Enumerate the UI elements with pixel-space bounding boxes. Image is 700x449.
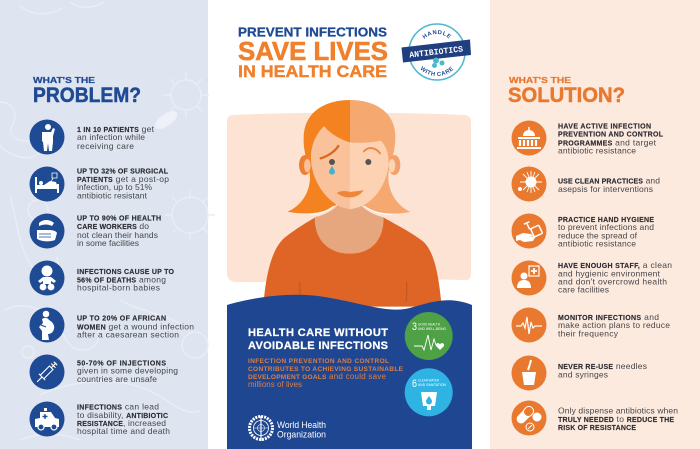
icon: syringe xyxy=(22,347,72,397)
tear xyxy=(329,166,335,175)
item: infection prevention programmes xyxy=(512,120,664,156)
logo: World Health Organization: Organization xyxy=(277,430,326,440)
text: surgical patients: PATIENTS get a post-op xyxy=(77,174,169,184)
badge: SDG 3 good health xyxy=(405,312,453,360)
text: hand hygiene: PRACTICE HAND HYGIENE xyxy=(558,217,654,224)
heading: health care without avoidable infections: AVOIDABLE INFECTIONS xyxy=(248,340,388,352)
panel: what's the solution xyxy=(490,0,700,449)
icon: health worker and medical cross xyxy=(512,260,546,296)
item: dispense antibiotics xyxy=(512,400,678,436)
heading: health care without avoidable infections xyxy=(248,327,388,352)
text: dispense antibiotics: RISK OF RESISTANCE xyxy=(558,425,636,432)
badge: SDG 6 clean water: AND SANITATION xyxy=(418,383,446,387)
text: dispense antibiotics: Only dispense antibiotics when xyxy=(558,405,678,415)
text: clean practices: asepsis for interventions xyxy=(558,184,653,194)
badge: handle antibiotics with care: HANDLE xyxy=(422,30,452,39)
text: surgical patients: infection, up to 51% xyxy=(77,182,152,192)
badge: SDG 3 good health: AND WELL-BEING xyxy=(418,327,446,331)
text: monitor infections: make action plans to reduce xyxy=(558,320,670,330)
item: never re-use needles xyxy=(512,356,647,390)
text: surgical patients xyxy=(77,168,169,200)
text: health care workers' hands: CARE WORKERS do xyxy=(77,221,149,231)
text: enough staff: care facilities xyxy=(558,285,609,295)
text: hand hygiene: antibiotic resistance xyxy=(558,239,636,249)
heading: what's the problem: WHAT'S THE xyxy=(33,75,95,85)
ears xyxy=(299,155,311,175)
text: hand hygiene: reduce the spread of xyxy=(558,230,638,240)
badge: handle antibiotics with care xyxy=(402,23,471,81)
text: hand hygiene: to prevent infections and xyxy=(558,222,654,232)
item: clean practices xyxy=(512,166,660,202)
icon: hospital bed xyxy=(30,166,64,202)
title: PREVENT INFECTIONS xyxy=(238,24,387,40)
badge: handle antibiotics with care: WITH CARE xyxy=(420,66,454,76)
title: SAVE LIVES xyxy=(238,36,388,66)
text: consequences of infections: RESISTANCE, increased xyxy=(77,418,166,428)
icon: hand and soap bottle xyxy=(512,214,546,248)
heading: what's the problem: PROBLEM? xyxy=(33,84,141,107)
text: enough staff: and hygienic environment xyxy=(558,268,661,278)
text: surgical patients: antibiotic resistant xyxy=(77,190,148,200)
text: dispense antibiotics: TRULY NEEDED to REDUCE THE xyxy=(558,414,674,424)
icon: pulse wave xyxy=(512,308,546,342)
item: deaths among babies xyxy=(30,260,175,296)
text: African women: UP TO 20% OF AFRICAN xyxy=(77,316,166,323)
text: 1 in 10 patients xyxy=(77,124,155,151)
text: African women: WOMEN get a wound infection xyxy=(77,321,194,331)
text: never re-use needles: NEVER RE-USE needles xyxy=(558,361,647,371)
text: health care workers' hands: in some facilities xyxy=(77,238,139,248)
hair, left half xyxy=(287,100,350,213)
text: consequences of infections xyxy=(77,401,170,436)
panel: health care without avoidable infections xyxy=(227,295,472,449)
text: never re-use needles xyxy=(558,361,647,379)
item: African women xyxy=(30,308,194,342)
text: deaths among babies: 56% OF DEATHS among xyxy=(77,275,166,285)
text: sustainable development goals: DEVELOPMENT GOALS and could save xyxy=(248,372,387,381)
icon: pills xyxy=(512,400,546,436)
badge: handle antibiotics with care: ANTIBIOTICS xyxy=(409,44,464,61)
text: sustainable development goals: CONTRIBUTES TO ACHIEVING SUSTAINABLE xyxy=(248,366,404,373)
hair, right half xyxy=(350,100,411,214)
text: consequences of infections: INFECTIONS can lead xyxy=(77,401,159,411)
badge: SDG 3 good health: 3 xyxy=(412,321,417,333)
text: deaths among babies xyxy=(77,269,175,293)
title xyxy=(238,24,388,81)
item: unsafe injections xyxy=(22,347,178,397)
item: monitor infections xyxy=(512,308,670,342)
text: consequences of infections: hospital time and death xyxy=(77,426,170,436)
panel: what's the problem xyxy=(0,0,215,449)
illustration: sad woman xyxy=(227,100,471,307)
text: infection prevention programmes: HAVE ACTIVE INFECTION xyxy=(558,124,651,131)
text: clean practices: USE CLEAN PRACTICES and xyxy=(558,175,660,185)
heading: what's the solution: WHAT'S THE xyxy=(509,75,571,85)
text: health care workers' hands xyxy=(77,216,161,248)
text: African women xyxy=(77,316,194,339)
badge: SDG 3 good health: GOOD HEALTH xyxy=(418,322,440,326)
brows xyxy=(321,146,338,158)
item: 1 in 10 patients xyxy=(30,120,155,154)
icon: baby xyxy=(30,260,64,296)
text: infection prevention programmes: PROGRAMMES and target xyxy=(558,137,657,147)
text: infection prevention programmes xyxy=(558,124,664,155)
face xyxy=(311,126,350,209)
text: monitor infections: MONITOR INFECTIONS and xyxy=(558,312,659,322)
badge: SDG 6 clean water xyxy=(405,368,453,416)
mouth xyxy=(337,190,364,197)
item: health care workers' hands xyxy=(30,214,161,248)
icon: washing hands xyxy=(30,214,64,248)
text: sustainable development goals: INFECTION PREVENTION AND CONTROL xyxy=(248,358,389,365)
text: never re-use needles: and syringes xyxy=(558,369,608,379)
text: infection prevention programmes: antibiotic resistance xyxy=(558,145,636,155)
title: IN HEALTH CARE xyxy=(238,62,387,81)
text: unsafe injections: given in some developing xyxy=(77,365,178,375)
text: deaths among babies: hospital-born babies xyxy=(77,283,160,293)
item: surgical patients xyxy=(30,166,169,202)
text: dispense antibiotics xyxy=(558,405,678,432)
text: clean practices xyxy=(558,175,660,194)
icon: germ burst xyxy=(512,166,546,202)
text: infection prevention programmes: PREVENTION AND CONTROL xyxy=(558,132,664,139)
neck xyxy=(315,204,384,254)
heading: what's the problem xyxy=(33,75,141,107)
text: health care workers' hands: UP TO 90% OF HEALTH xyxy=(77,216,161,222)
text: surgical patients: UP TO 32% OF SURGICAL xyxy=(77,168,169,176)
badge: SDG 6 clean water: 6 xyxy=(412,378,417,390)
item: hand hygiene xyxy=(512,214,654,249)
text: consequences of infections: to disability, ANTIBIOTIC xyxy=(77,410,168,420)
text: African women: after a caesarean section xyxy=(77,329,179,339)
text: unsafe injections xyxy=(77,360,178,384)
icon: government building xyxy=(512,120,546,156)
item: consequences of infections xyxy=(30,401,170,436)
item: enough staff xyxy=(512,260,672,296)
text: sustainable development goals: millions of lives xyxy=(248,380,302,389)
text: monitor infections xyxy=(558,312,670,339)
text: 1 in 10 patients: an infection while xyxy=(77,132,145,142)
icon: ambulance xyxy=(30,402,64,436)
icon: patient standing xyxy=(30,120,64,154)
icon: pregnant woman xyxy=(30,308,64,342)
badge: SDG 6 clean water: CLEAN WATER xyxy=(418,378,439,382)
heading: what's the solution: SOLUTION? xyxy=(508,84,625,107)
text: unsafe injections: countries are unsafe xyxy=(77,374,157,384)
shirt xyxy=(263,217,442,307)
text: unsafe injections: 50-70% OF INJECTIONS xyxy=(77,360,166,367)
text: sustainable development goals xyxy=(248,358,404,389)
text: health care workers' hands: not clean their hands xyxy=(77,230,158,240)
logo: World Health Organization: World Health xyxy=(277,420,326,431)
text: monitor infections: their frequency xyxy=(558,329,619,339)
text: deaths among babies: INFECTIONS CAUSE UP TO xyxy=(77,269,175,276)
eyes xyxy=(329,159,335,165)
text: 1 in 10 patients: receiving care xyxy=(77,141,134,151)
heading: health care without avoidable infections: HEALTH CARE WITHOUT xyxy=(248,327,388,339)
text: hand hygiene xyxy=(558,217,654,249)
text: enough staff: and don't overcrowd health xyxy=(558,277,667,287)
text: 1 in 10 patients: 1 IN 10 PATIENTS get xyxy=(77,124,155,134)
logo: World Health Organization xyxy=(250,416,326,441)
icon: sharps cup and syringe xyxy=(512,356,546,390)
text: enough staff: HAVE ENOUGH STAFF, a clean xyxy=(558,260,672,270)
text: enough staff xyxy=(558,260,672,295)
